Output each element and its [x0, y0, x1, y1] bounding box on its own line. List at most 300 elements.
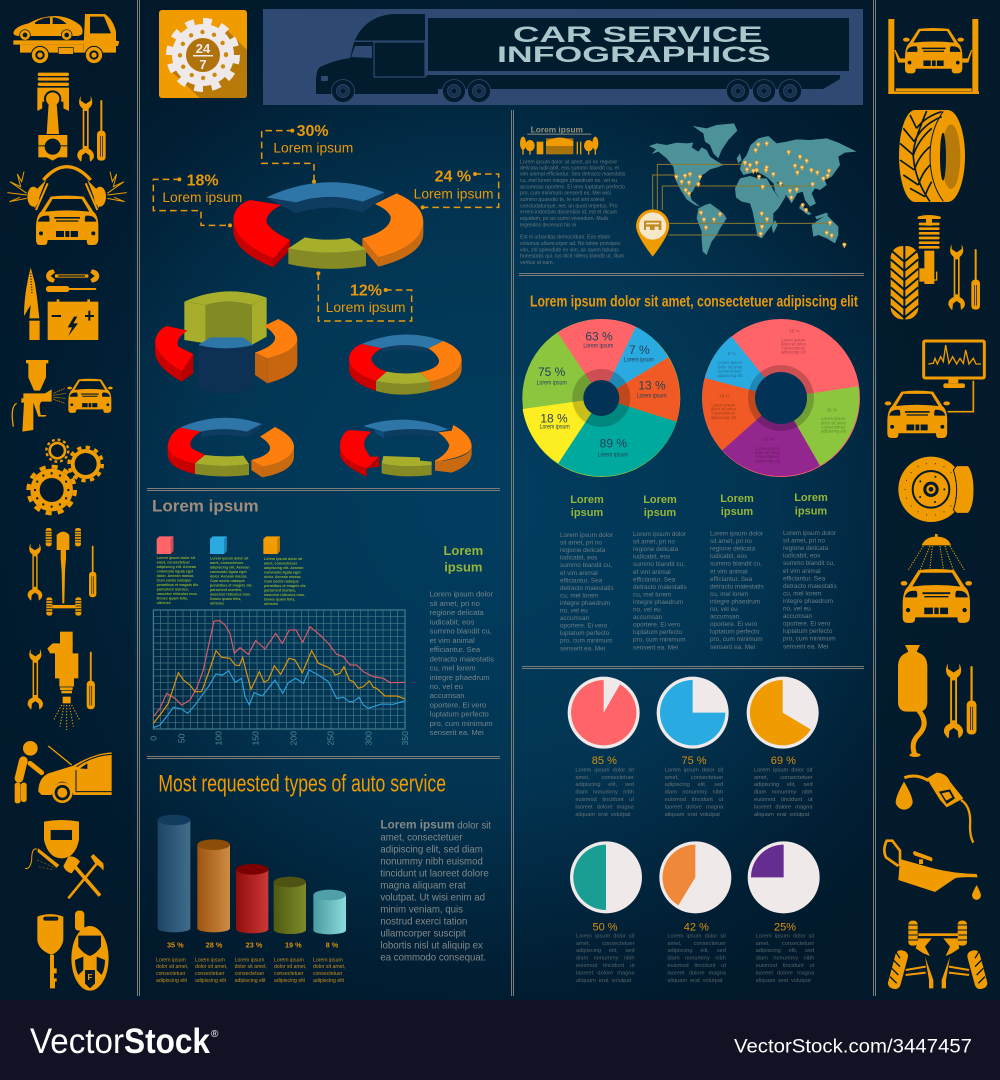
pie chart: left donut: Lorem ipsum — [537, 379, 567, 386]
caption column 3: et vim animal — [710, 568, 748, 575]
left icon column — [7, 14, 127, 991]
caption column 1 — [560, 494, 614, 652]
caption column 3: no, vel eu — [710, 606, 738, 613]
caption column 4: senserit ea. Mei — [783, 643, 828, 650]
paragraph: dolor sit — [455, 820, 491, 831]
pie chart: right donut: dolor sit amet — [755, 450, 781, 455]
map description text: concludaturque, nec an quod impetus. Pro — [520, 203, 618, 209]
line chart: 250 — [326, 731, 336, 746]
legend text: ultricies — [264, 602, 278, 606]
caption column 2: integre phaedrum — [633, 599, 683, 606]
caption column 3: detracto maiestatis — [710, 583, 764, 590]
bar captions — [156, 957, 345, 984]
callout labels: Lorem ipsum — [273, 140, 353, 156]
legend text: dolor. Aenean massa. — [264, 575, 301, 579]
bar percent labels: 35 % — [167, 941, 184, 950]
icon: garage and trees — [520, 137, 598, 155]
map description text: veritus at eam. — [520, 260, 554, 266]
pie chart: left donut: 75 % — [538, 365, 566, 379]
bar captions: consectetuer — [195, 971, 225, 977]
pie chart: right donut: consectetuer — [755, 454, 780, 459]
side note text: et vim animal — [430, 636, 475, 645]
map description text: equidem, pri an sumo vivendum. Malis — [520, 216, 609, 222]
pie 50%: euismod tincidunt ut — [576, 963, 635, 969]
title banner with truck — [263, 9, 863, 105]
pie 50%: laoreet dolore magna — [576, 970, 635, 976]
pie chart: right donut: 35 % — [789, 329, 800, 334]
pie 69%: 69 % — [771, 755, 796, 767]
caption column 3: summo blandit cu, — [710, 561, 762, 568]
icon: welding mask and tools — [25, 820, 104, 898]
caption column 2: Lorem ipsum dolor — [633, 531, 687, 538]
caption column 3: ipsum — [721, 506, 753, 518]
legend text: ultricies — [210, 601, 224, 605]
map description text: vim, zril splendide ex vim, an quem fabulas — [520, 247, 619, 253]
bar captions: dolor sit amet, — [156, 964, 188, 970]
panel: most requested services — [156, 771, 491, 984]
heading: pie charts: Lorem ipsum dolor sit amet, consectetuer adipiscing elit — [530, 294, 859, 310]
caption column 1: Lorem ipsum dolor — [560, 532, 614, 539]
legend text: Cum sociis natoque — [264, 579, 299, 583]
pie chart: left donut: 89 % — [600, 436, 627, 450]
panel: 3D ring diagrams — [153, 123, 499, 477]
legend text: Donec quam felis, — [264, 597, 295, 601]
title text: CAR SERVICE — [513, 23, 763, 47]
icon: brake disc — [898, 457, 974, 522]
pie 42%: aliquam erat volutpat — [667, 978, 723, 984]
pie 85%: Lorem ipsum dolor sit — [575, 767, 634, 773]
legend text: Lorem ipsum dolor sit — [210, 556, 249, 560]
pie 50%: adipiscing elit, sed — [576, 948, 635, 954]
caption column 1: Lorem — [570, 494, 604, 506]
pie chart: left donut — [522, 319, 680, 477]
pie 85%: diam nonummy nibh — [575, 790, 634, 796]
paragraph: Lorem ipsum — [380, 817, 455, 831]
bar captions: adipiscing elit — [235, 978, 266, 984]
side note text: oportere. Ei vero — [430, 700, 486, 709]
bar captions: Lorem ipsum — [313, 957, 343, 963]
pie 42%: adipiscing elit, sed — [667, 948, 726, 954]
brand wordmark: Vector — [30, 1022, 124, 1061]
caption column 4: cu, mel lorem — [783, 590, 821, 597]
paragraph: volutpat. Ut wisi enim ad — [380, 892, 485, 903]
line chart: 200 — [288, 731, 298, 746]
bar percent labels: 28 % — [206, 941, 223, 950]
panel: 24/7 badge: 24 — [196, 41, 211, 56]
pie 25%: amet, consectetuer — [756, 941, 814, 947]
caption column 4: oportere. Ei vero — [783, 621, 831, 628]
caption column 4: pro, cum minimum — [783, 636, 836, 643]
icon: spray gun and car — [12, 360, 113, 432]
pie 85%: amet, consectetuer — [575, 775, 634, 781]
line chart: 0 — [148, 736, 158, 741]
pie chart: right donut: adipiscing elit — [821, 429, 847, 434]
paragraph: ea commodo consequat. — [380, 952, 486, 963]
map location pins — [674, 141, 846, 248]
pie 42%: euismod tincidunt ut — [667, 963, 726, 969]
pie 50%: 50 % — [592, 921, 618, 933]
pie 75%: amet, consectetuer — [665, 775, 723, 781]
caption column 3: Lorem — [720, 493, 754, 505]
caption column 3: senserit ea. Mei — [710, 644, 755, 651]
pie chart: right donut: dolor sit amet — [711, 407, 737, 412]
map description text: volumus ullamcorper ad. No latine principes — [520, 241, 621, 247]
icon: car with headphones — [7, 167, 127, 245]
caption column 1: detracto maiestatis — [560, 585, 614, 592]
side note text: luptatum perfecto — [430, 710, 489, 719]
caption column 1: no, vel eu — [560, 608, 588, 614]
pie 50%: aliquam erat volutpat — [576, 978, 632, 984]
bar captions: consectetuer — [156, 971, 186, 977]
bar percent labels: 8 % — [326, 941, 339, 950]
pie 85%: euismod tincidunt ut — [575, 797, 634, 803]
pie 85%: adipiscing elit, sed — [575, 782, 634, 788]
bar captions: consectetuer — [313, 971, 343, 977]
caption column 4: ipsum — [795, 506, 827, 518]
pie 75%: laoreet dolore magna — [665, 804, 724, 810]
legend text: dolor. Aenean massa. — [210, 574, 247, 578]
caption column 2: regione delicata — [633, 546, 679, 553]
caption column 1: summo blandit cu, — [560, 562, 612, 569]
pie 75% — [657, 677, 729, 818]
pie 75%: Lorem ipsum dolor sit — [665, 767, 724, 773]
callout labels: 12% — [350, 283, 382, 300]
side note text: efficiantur. Sea — [430, 645, 481, 654]
exploded donut variant — [155, 291, 297, 393]
legend text: penatibus et magnis dis — [264, 584, 306, 588]
closed donut variant — [349, 335, 462, 395]
pie 50%: Lorem ipsum dolor sit — [576, 933, 635, 939]
bar captions: Lorem ipsum — [274, 957, 304, 963]
side note text: summo blandit cu, — [430, 627, 492, 636]
caption column 4: sit amet, pri no — [783, 538, 825, 545]
caption column 4 — [783, 492, 837, 650]
caption column 3: efficiantur. Sea — [710, 576, 753, 583]
pie 69% — [747, 677, 819, 818]
pie 69%: Lorem ipsum dolor sit — [754, 767, 813, 773]
caption column 1: sit amet, pri no — [560, 540, 602, 547]
caption column 1: cu, mel lorem — [560, 592, 598, 599]
pie chart: left donut: Lorem ipsum — [624, 356, 654, 363]
bar captions: adipiscing elit — [274, 978, 306, 984]
caption column 4: luptatum perfecto — [783, 628, 833, 635]
paragraph: ullamcorper suscipit — [380, 928, 466, 939]
bar percent labels: 23 % — [246, 941, 263, 950]
caption column 4: accumsan — [783, 613, 813, 620]
caption column 3: pro, cum minimum — [710, 636, 763, 643]
bar captions: dolor sit amet, — [195, 964, 227, 970]
legend text: Cum sociis natoque — [157, 578, 191, 582]
caption column 2: iudicabit, eos — [633, 554, 670, 561]
caption column 2: accumsan — [633, 614, 663, 621]
pie 42%: 42 % — [684, 921, 709, 933]
callout labels: 30% — [297, 123, 329, 140]
map description text: pro, cum minimum senserit ea. Mei wisi — [520, 191, 611, 197]
paragraph: minim veniam, quis — [380, 904, 463, 915]
icon: oil can — [884, 841, 981, 900]
pie chart: right donut: Lorem ipsum — [718, 360, 743, 365]
pie 25%: euismod tincidunt ut — [756, 963, 815, 969]
right icon column — [884, 19, 989, 990]
panel: line chart section — [148, 497, 494, 746]
paragraph: nonummy nibh euismod — [380, 856, 483, 867]
bar captions: adipiscing elit — [195, 978, 227, 984]
callout labels: Lorem ipsum — [326, 299, 406, 315]
title text — [497, 23, 771, 67]
caption column 1: iudicabit, eos — [560, 555, 597, 562]
section heading: Lorem ipsum — [152, 497, 259, 516]
legend text: commodo ligula eget — [264, 570, 301, 574]
bar captions: dolor sit amet, — [313, 964, 345, 970]
caption column 4: regione delicata — [783, 545, 829, 552]
icon: muffler and tools — [898, 645, 976, 757]
line chart: 350 — [400, 731, 410, 746]
caption column 3: integre phaedrum — [710, 598, 760, 605]
callout labels: 24 % — [435, 169, 471, 186]
caption column 2: et vim animal — [633, 569, 671, 576]
caption column 1: luptatum perfecto — [560, 630, 610, 637]
pie 42%: amet, consectetuer — [667, 941, 726, 947]
caption column 3 — [710, 493, 764, 651]
pie 85%: 85 % — [592, 755, 617, 767]
caption column 2: sit amet, pri no — [633, 539, 675, 546]
notched donut variant — [340, 420, 472, 477]
pie 75%: diam nonummy nibh — [665, 790, 723, 796]
pie chart: left donut: 13 % — [638, 378, 666, 392]
panel: 24/7 badge — [159, 10, 247, 98]
caption column 2 — [633, 494, 687, 651]
callout labels: Lorem ipsum — [162, 189, 242, 205]
callouts for main donut — [153, 131, 499, 321]
legend text: commodo ligula eget — [210, 570, 247, 574]
pie 42% — [659, 841, 731, 984]
side note text: integre phaedrum — [430, 673, 490, 682]
pie chart: left donut: Lorem ipsum — [637, 392, 667, 399]
bar percent labels — [167, 941, 339, 950]
bar captions: Lorem ipsum — [156, 957, 186, 963]
pie 85%: aliquam erat volutpat — [575, 812, 631, 818]
icon: battery and tools — [24, 268, 99, 340]
legend text: adipiscing elit. Aenean — [264, 566, 303, 570]
legend text: commodo ligula eget — [157, 569, 194, 573]
pie chart: right donut: adipiscing elit — [711, 415, 737, 420]
bar captions: Lorem ipsum — [195, 957, 225, 963]
caption column 1: efficiantur. Sea — [560, 577, 603, 584]
paragraph: magna aliquam erat — [380, 880, 466, 891]
footer watermark: ® — [211, 1029, 219, 1040]
bar captions: dolor sit amet, — [235, 964, 267, 970]
pie 69%: laoreet dolore magna — [754, 804, 813, 810]
pie 85%: laoreet dolore magna — [575, 804, 635, 810]
side note text: cu, mel lorem — [430, 664, 476, 673]
pie chart: right donut: Lorem ipsum — [711, 403, 736, 408]
map description text: errem indoctum dissentias id, est et dicunt — [520, 210, 617, 216]
pie 75%: 75 % — [681, 755, 707, 767]
caption column 3: sit amet, pri no — [710, 538, 752, 545]
caption column 4: detracto maiestatis — [783, 583, 837, 590]
caption column 2: senserit ea. Mei — [633, 644, 678, 651]
caption column 2: no, vel eu — [633, 606, 661, 614]
map heading: Lorem ipsum — [531, 124, 583, 134]
map description text: accumsan oportere. Ei vero luptatum perfecto — [520, 184, 625, 190]
side note text: detracto maiestatis — [430, 654, 494, 663]
icon: car keys — [37, 911, 109, 991]
legend text: nascetur ridiculus mus. — [210, 592, 251, 596]
pie chart: right donut — [702, 319, 860, 477]
footer watermark — [30, 1022, 972, 1061]
bar captions: Lorem ipsum — [235, 957, 264, 963]
pie 42%: Lorem ipsum dolor sit — [667, 933, 726, 939]
caption column 4: iudicabit, eos — [783, 553, 820, 560]
pie chart: right donut: adipiscing elit — [755, 458, 781, 463]
pie 75%: aliquam erat volutpat — [665, 812, 720, 818]
callout labels: 18% — [187, 172, 219, 189]
pie chart: right donut: 8 % — [728, 351, 736, 356]
caption column 4: et vim animal — [783, 568, 821, 575]
section heading: Most requested types of auto service — [158, 771, 446, 798]
side note heading: ipsum — [444, 560, 482, 575]
pie 85% — [568, 677, 640, 818]
pie chart: right donut: Lorem ipsum — [781, 337, 806, 342]
caption column 3: accumsan — [710, 614, 740, 621]
legend text: amet, consectetuer — [264, 561, 298, 565]
caption column 1: regione delicata — [560, 547, 606, 554]
pie chart: right donut: 19 % — [719, 394, 730, 399]
caption column 3: Lorem ipsum dolor — [710, 530, 764, 538]
legend text: adipiscing elit. Aenean — [210, 565, 249, 569]
panel: 24/7 badge: 7 — [199, 57, 207, 72]
bar captions: consectetuer — [274, 971, 304, 977]
pie 25% — [748, 841, 820, 984]
legend text: nascetur ridiculus mus. — [264, 593, 305, 597]
icon: steering axle and tools — [28, 528, 96, 616]
caption column 4: efficiantur. Sea — [783, 575, 826, 582]
pie 50% — [570, 841, 642, 984]
caption column 3: oportere. Ei vero — [710, 621, 758, 628]
pie 50%: amet, consectetuer — [576, 941, 635, 947]
legend text: penatibus et magnis dis — [210, 583, 252, 587]
bar captions: dolor sit amet, — [274, 964, 306, 970]
caption column 2: pro, cum minimum — [633, 637, 686, 644]
side note text: regione delicata — [430, 608, 484, 617]
caption column 2: ipsum — [644, 507, 676, 519]
pie chart: right donut: dolor sit amet — [781, 341, 807, 346]
caption column 2: oportere. Ei vero — [633, 622, 681, 629]
caption column 1: ipsum — [571, 507, 603, 519]
caption column 2: detracto maiestatis — [633, 584, 687, 591]
side note text: no, vel eu — [430, 682, 463, 691]
line chart: 300 — [363, 731, 373, 746]
world map — [649, 123, 857, 255]
caption column 2: cu, mel lorem — [633, 591, 671, 598]
pie 25%: 25% — [774, 921, 796, 933]
pie chart: right donut: adipiscing elit — [781, 349, 807, 354]
caption column 2: efficiantur. Sea — [633, 576, 676, 583]
legend text: parturient montes, — [264, 588, 296, 592]
map description text: Lorem ipsum dolor sit amet, pri no regione — [520, 159, 617, 165]
main donut chart — [233, 182, 423, 269]
caption column 3: cu, mel lorem — [710, 591, 748, 598]
caption column 4: Lorem — [794, 492, 828, 504]
caption column 3: luptatum perfecto — [710, 629, 760, 636]
pie chart: left donut: Lorem ipsum — [540, 424, 570, 431]
paragraph: lobortis nisl ut aliquip ex — [380, 940, 483, 951]
brand wordmark: Stock — [124, 1022, 210, 1061]
bar captions: adipiscing elit — [313, 978, 345, 984]
pie 69%: amet, consectetuer — [754, 775, 813, 781]
pie 25%: Lorem ipsum dolor sit — [756, 933, 815, 939]
map description text: legendos deserunt his ei — [520, 222, 576, 228]
side note text: Lorem ipsum dolor — [430, 590, 494, 599]
pie chart: right donut: consectetuer — [821, 424, 846, 429]
pie 25%: aliquam erat volutpat — [756, 978, 811, 984]
icon: tow truck — [13, 14, 119, 64]
icon: large location pin — [636, 209, 669, 257]
pie 42%: diam nonummy nibh — [667, 956, 726, 962]
pie chart: right donut: 28 % — [826, 407, 837, 412]
panel: world map section — [520, 123, 857, 266]
pie chart: right donut: adipiscing elit — [718, 373, 743, 378]
icon: car keys: F — [88, 973, 93, 982]
panel: percentage pies — [568, 677, 820, 984]
cylinder bar chart — [158, 815, 346, 934]
caption column 3: iudicabit, eos — [710, 553, 747, 560]
legend text: parturient montes, — [210, 588, 242, 592]
icon: car wash — [901, 534, 972, 623]
bar captions: adipiscing elit — [156, 978, 188, 984]
pie 75%: adipiscing elit, sed — [665, 782, 723, 788]
caption column 1: senserit ea. Mei — [560, 645, 605, 652]
pie chart: right donut: consectetuer — [781, 345, 806, 350]
legend text — [157, 556, 306, 606]
legend text: Lorem ipsum dolor sit — [157, 556, 196, 560]
legend cubes — [157, 536, 280, 554]
caption column 2: summo blandit cu, — [633, 561, 685, 568]
line chart: 100 — [213, 731, 223, 746]
icon: car lift — [888, 19, 979, 94]
pie chart: left donut: Lorem ipsum — [583, 342, 614, 349]
pie chart: right donut: Lorem ipsum — [821, 416, 846, 421]
pie 25%: laoreet dolore magna — [756, 970, 815, 976]
legend text: penatibus et magnis dis — [157, 583, 198, 587]
caption column 1: integre phaedrum — [560, 600, 610, 607]
icon: fuel nozzle and drop — [896, 773, 973, 843]
title text: INFOGRAPHICS — [497, 43, 771, 67]
pie chart: right donut: dolor sit amet — [821, 420, 847, 425]
pie chart: right donut: consectetuer — [718, 369, 743, 374]
legend text: parturient montes, — [157, 587, 189, 591]
side note text: pro, cum minimum — [430, 719, 493, 728]
map description text: Est ei urbanitas democritum. Eos etiam — [520, 235, 610, 241]
map description text: honestatis qui. Ius dicit ridens blandit ut, illum — [520, 254, 624, 260]
pie chart: left donut: Lorem ipsum — [598, 451, 628, 458]
side note text: accumsan — [430, 691, 465, 700]
legend text: adipiscing elit. Aenean — [157, 565, 196, 569]
icon: suspension — [887, 921, 989, 990]
pie chart: right donut: dolor sit amet — [718, 364, 743, 369]
side note text: sit amet, pri no — [430, 599, 480, 608]
legend text: dolor. Aenean massa. — [157, 574, 194, 578]
pie 25%: diam nonummy nibh — [756, 956, 814, 962]
pie chart: left donut: 18 % — [540, 412, 568, 426]
caption column 2: Lorem — [643, 494, 677, 506]
map connector lines — [653, 164, 830, 235]
caption column 3: regione delicata — [710, 546, 756, 553]
legend text: Donec quam felis, — [157, 596, 188, 600]
paragraph: tincidunt ut laoreet dolore — [380, 868, 489, 879]
legend text: amet, consectetuer — [210, 561, 244, 565]
legend text: amet, consectetuer — [157, 560, 191, 564]
